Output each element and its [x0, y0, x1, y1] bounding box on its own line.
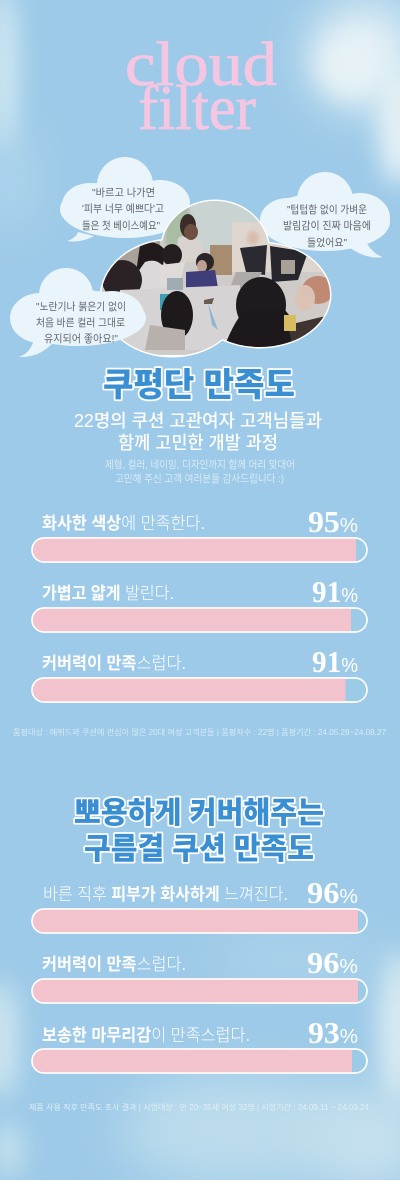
bubble quote: top right: 발림감이 진짜 마음에 — [283, 220, 371, 232]
survey row: light application 91% — [31, 582, 368, 633]
description text: 제형, 컬러, 네이밍, 디자인까지 함께 머리 맞대어 — [105, 458, 295, 471]
speech bubble: bottom left — [10, 268, 146, 357]
survey row: powdery finish 93%: 보송한 마무리감이 만족스럽다. — [42, 1026, 250, 1045]
bubble quote: top left — [82, 187, 164, 232]
survey row: bright colour 95%: 95% — [308, 504, 358, 539]
description text — [105, 458, 295, 485]
survey row: coverage 96%: 커버력이 만족스럽다. — [42, 955, 186, 974]
footnote: usage survey: 제품 사용 직후 만족도 조사 결과 | 시험대상 : 만 20~35세 여성 32명 | 시험기간 : 24.09.11 ~ 24.09.24 — [29, 1102, 370, 1112]
survey row: coverage 91%: 커버력이 만족스럽다. — [42, 654, 186, 673]
survey row: skin brightening 96%: 바른 직후 피부가 화사하게 느껴진다. — [43, 885, 288, 904]
bubble quote: bottom left — [36, 300, 126, 345]
bubble quote: bottom left: 유지되어 좋아요!" — [44, 333, 118, 345]
heading: cloud cushion satisfaction: 구름결 쿠션 만족도 — [84, 833, 314, 866]
bubble quote: top left: '피부 너무 예쁘다'고 — [82, 202, 164, 215]
survey row: skin brightening 96%: 96% — [307, 875, 358, 910]
bubble quote: top right: 들었어요" — [307, 237, 347, 249]
survey row: coverage 96%: 96% — [307, 945, 358, 980]
bubble quote: top left: "바르고 나가면 — [92, 187, 155, 199]
description text: 고민해 주신 고객 여러분들 감사드립니다 :) — [115, 472, 284, 485]
bubble quote: bottom left: 처음 바른 컬러 그대로 — [36, 316, 125, 329]
subheading — [74, 411, 322, 453]
logo: cloud filter: filter — [138, 72, 256, 143]
survey row: coverage 91% — [31, 652, 368, 703]
survey row: bright colour 95% — [31, 512, 368, 563]
bubble quote: top right — [283, 203, 371, 249]
survey row: bright colour 95%: 화사한 색상에 만족한다. — [42, 514, 205, 533]
bubble quote: top right: "텁텁함 없이 가벼운 — [287, 203, 367, 216]
speech bubble: top right — [260, 172, 390, 258]
bubble quote: bottom left: "노란기나 붉은기 없이 — [36, 300, 126, 313]
subheading: 함께 고민한 개발 과정 — [118, 433, 278, 453]
speech bubble: top left — [60, 157, 190, 241]
subheading: 22명의 쿠션 고관여자 고객님들과 — [74, 411, 322, 431]
survey row: powdery finish 93%: 93% — [308, 1015, 358, 1050]
heading: cloud cushion satisfaction — [74, 797, 324, 866]
heading: panel satisfaction: 쿠평단 만족도 — [103, 366, 295, 403]
survey row: coverage 91%: 91% — [312, 644, 358, 679]
logo: cloud filter: cloud — [125, 31, 277, 99]
survey row: skin brightening 96% — [31, 883, 368, 934]
survey row: coverage 96% — [31, 953, 368, 1004]
survey row: powdery finish 93% — [31, 1023, 368, 1074]
heading: cloud cushion satisfaction: 뽀용하게 커버해주는 — [74, 797, 324, 830]
footnote: panel survey: 품평대상 : 에뛰드와 쿠션에 관심이 많은 20대 여성 고객분들 | 품평자수 : 22명 | 품평기간 : 24.05.29~24.08.27 — [13, 727, 387, 737]
bubble quote: top left: 들은 첫 베이스예요" — [82, 219, 160, 232]
photo: customer panel in cloud frame — [95, 195, 335, 356]
survey row: light application 91%: 91% — [312, 574, 358, 609]
survey row: light application 91%: 가볍고 얇게 발린다. — [42, 584, 174, 603]
logo: cloud filter — [125, 31, 277, 143]
